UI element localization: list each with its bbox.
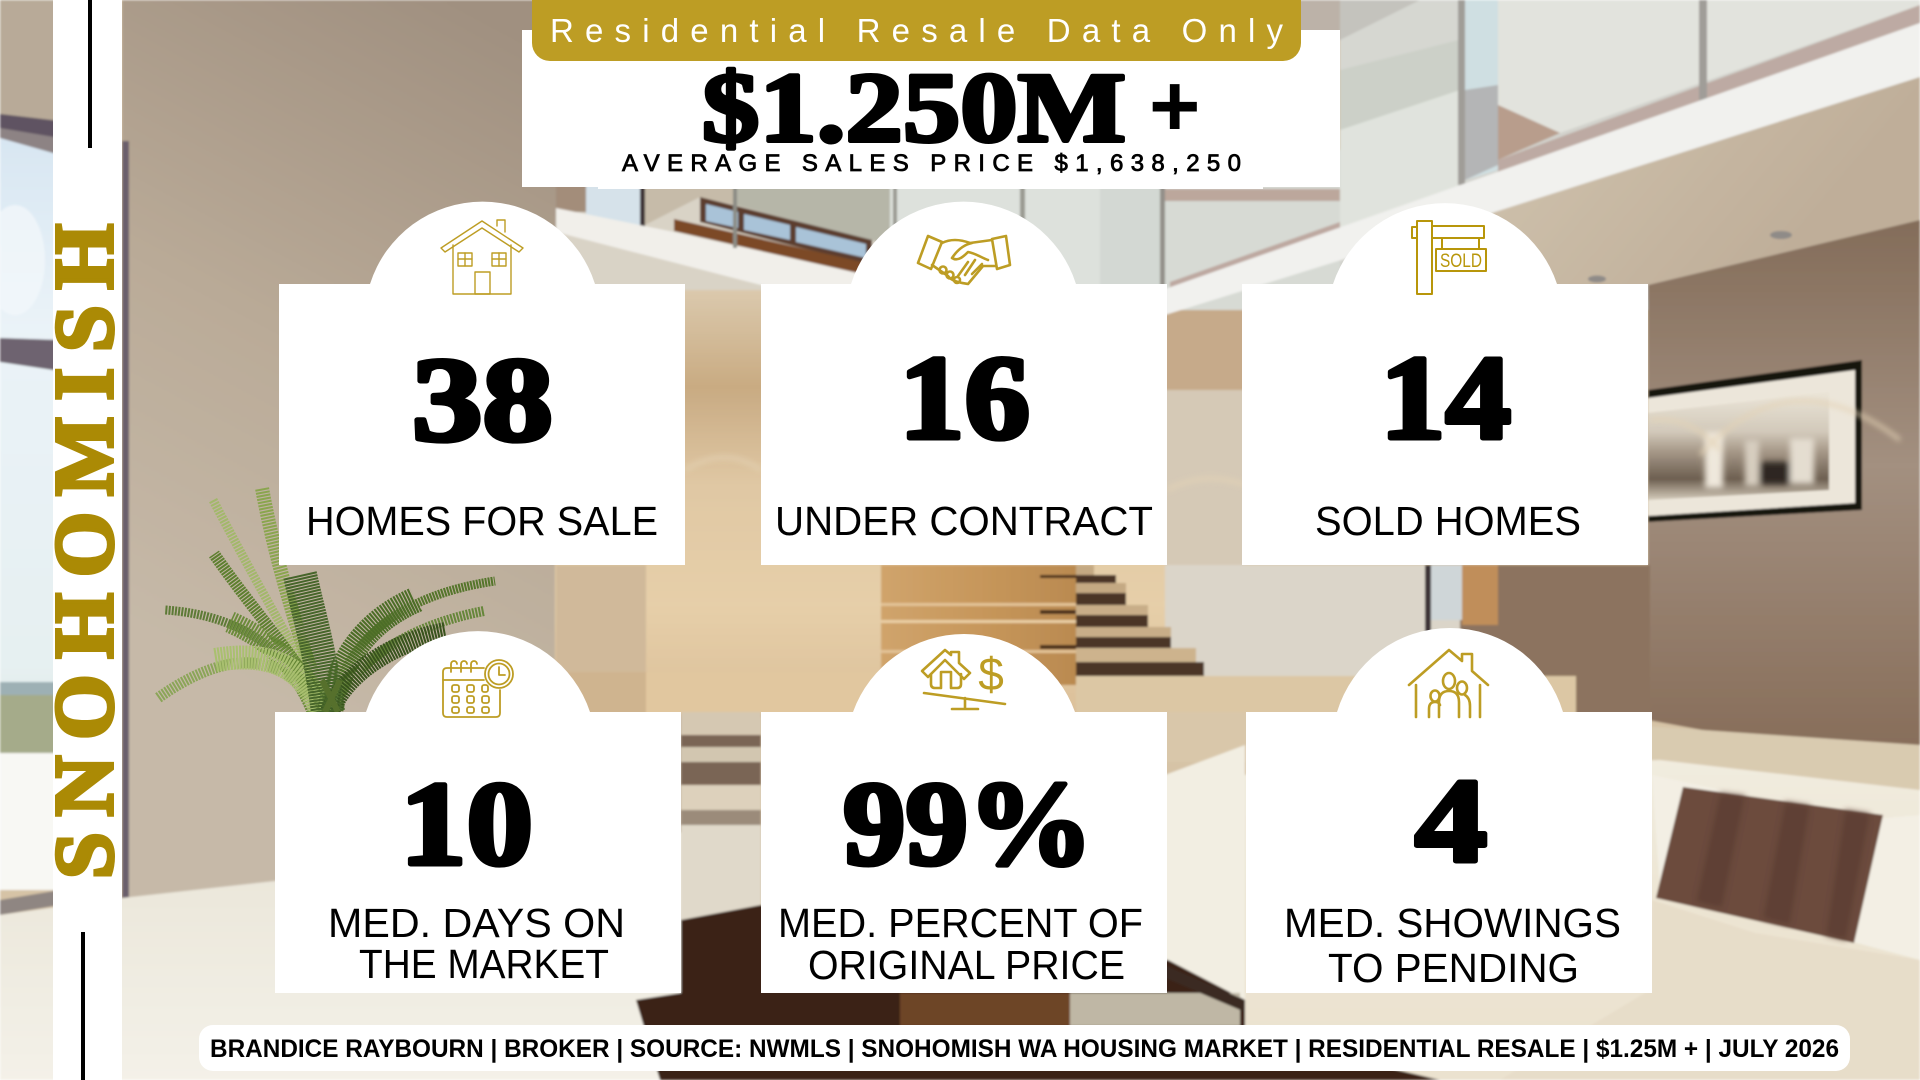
label: MED. SHOWINGS — [1284, 900, 1621, 946]
pale floor tan — [1076, 676, 1576, 716]
gold banner — [532, 0, 1301, 61]
icon: handshake — [918, 236, 1010, 284]
panel: median days on market — [275, 631, 681, 993]
label: SOLD HOMES — [1315, 498, 1581, 544]
panel: median percent of original price — [761, 634, 1167, 993]
light arcs on walls — [685, 401, 1900, 490]
footer text: BRANDICE RAYBOURN | BROKER | SOURCE: NWMLS | SNOHOMISH WA HOUSING MARKET | RESIDENTIAL RESALE | $1.25M + | JULY 2026 — [210, 1035, 1839, 1063]
left floor — [0, 830, 700, 1080]
side strip with city name — [38, 0, 131, 1080]
label: THE MARKET — [359, 941, 609, 987]
sofa — [1165, 760, 1920, 1080]
panel: median showings to pending — [1246, 628, 1652, 993]
icon: calendar with clock — [443, 660, 513, 717]
picture frame on wall — [1648, 360, 1862, 522]
icon: house and dollar balance: $ — [978, 648, 1004, 700]
icon: sold sign — [1412, 221, 1486, 294]
label: MED. PERCENT OF — [778, 900, 1143, 946]
panel: homes for sale — [279, 202, 685, 565]
top header panel — [522, 0, 1340, 189]
panel: sold homes — [1242, 203, 1648, 565]
icon: family in house — [1409, 650, 1488, 717]
headline price: $1.250M — [702, 52, 1126, 163]
label — [1284, 900, 1621, 991]
bottom rule — [81, 932, 85, 1080]
label: ORIGINAL PRICE — [808, 942, 1125, 988]
icon: sold sign: SOLD — [1440, 251, 1482, 272]
mezzanine top band — [556, 180, 1196, 290]
banner text: Residential Resale Data Only — [550, 12, 1284, 49]
stairs — [1076, 565, 1204, 676]
number: 16 — [899, 331, 1030, 464]
column right of middle card — [1165, 284, 1245, 400]
top rule — [88, 0, 92, 148]
top right upper storey — [1290, 0, 1350, 40]
rug — [636, 905, 1440, 1080]
icon: house and dollar balance — [922, 648, 1005, 709]
label: UNDER CONTRACT — [775, 498, 1153, 544]
right wall — [1648, 220, 1920, 770]
panel: under contract — [761, 202, 1167, 565]
label: MED. DAYS ON — [328, 900, 625, 946]
wood panel — [881, 565, 1076, 685]
city name: SNOHOMISH — [38, 224, 131, 879]
left wall — [122, 0, 702, 905]
label — [328, 900, 625, 987]
door and stairs area — [1425, 565, 1431, 635]
wall corner — [122, 141, 129, 898]
window beyond strip — [0, 0, 60, 1080]
number: 10 — [400, 757, 533, 890]
warm wall — [555, 284, 1195, 714]
number: 4 — [1415, 754, 1487, 887]
number: 99% — [843, 757, 1093, 890]
label: TO PENDING — [1328, 945, 1579, 991]
plant: fern — [158, 488, 495, 712]
label: HOMES FOR SALE — [306, 498, 658, 544]
label — [778, 900, 1143, 988]
white beam — [1165, 23, 1920, 315]
number: 38 — [412, 333, 553, 466]
ceiling — [1300, 77, 1920, 300]
average sales price: AVERAGE SALES PRICE $1,638,250 — [622, 150, 1241, 177]
icon: house — [441, 220, 523, 294]
number: 14 — [1380, 331, 1511, 464]
lower steps — [681, 712, 761, 925]
cushion — [1656, 787, 1883, 943]
plus sign: + — [1149, 56, 1200, 155]
footer credit bar — [199, 1025, 1850, 1071]
